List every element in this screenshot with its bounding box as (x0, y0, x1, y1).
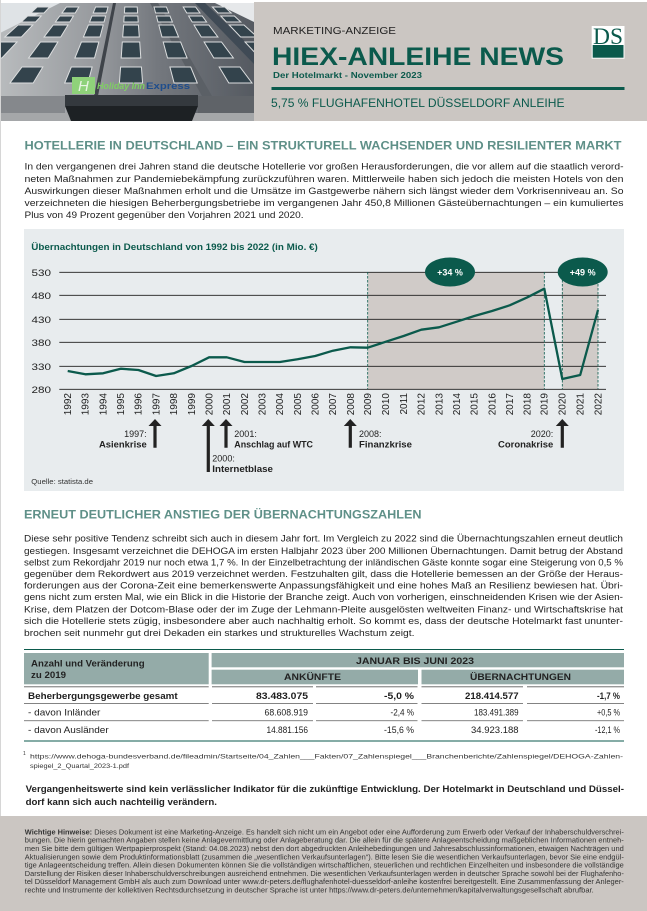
body text block: gens nicht zum ersten Mal, wie ein Blick in die Historie der Branche zeigt. Auch von vorherigen, einschneidenden Krisen wie der Asien- (24, 592, 623, 602)
x axis year labels: 2018 (523, 393, 534, 415)
x axis year labels: 2009 (363, 393, 374, 415)
arrow: 2000 dotcom bubble (202, 419, 273, 474)
x axis year labels: 2017 (505, 393, 516, 415)
x axis year labels: 2000 (204, 393, 215, 415)
body text block: sich die Hotellerie stets zügig, insbesondere aber auch nachhaltig erholt. So kommt es, dass der deutsche Hotelmarkt fast ununter- (24, 616, 623, 626)
badge: +49 % (558, 258, 608, 286)
table row: foreign (28, 725, 620, 735)
newsletter title: HIEX-ANLEIHE NEWS (272, 43, 564, 71)
arrow: 2008 financial crisis: Finanzkrise (359, 439, 412, 449)
table row: total (28, 691, 620, 701)
table header (24, 653, 624, 684)
intro text block: neten Maßnahmen zur Pandemiebekämpfung zurückzuführen waren. Mittlerweile haben sich jedoch die meisten Hotels von den (24, 174, 624, 184)
hotel sign: Express (146, 81, 190, 91)
hotel sign: H (78, 78, 89, 95)
arrow: 2020 corona crisis: 2020: (531, 429, 553, 439)
intro text block (24, 162, 624, 220)
intro text block: In den vergangenen drei Jahren stand die deutsche Hotellerie vor großen Herausforderungen, die vor allem auf die staatlich verord- (24, 162, 624, 172)
table row: domestic: - davon Inländer (28, 708, 100, 718)
table row: foreign: -15,6 % (384, 725, 414, 735)
panel: important notes footer: Darstellung der Risiken dieser Inhaberschuldverschreibungen ausreichend entnehmen. Die wesentlichen Verkaufsunterlagen werden in deutscher Sprache sowohl bei der Flughafenho- (25, 871, 624, 878)
panel: overnight stays chart (24, 229, 624, 491)
table row: domestic: 68.608.919 (264, 708, 308, 718)
panel: important notes footer (0, 816, 647, 911)
shaded growth period 2020-2022 (562, 272, 598, 389)
bond name: 5,75 % FLUGHAFENHOTEL DÜSSELDORF ANLEIHE (271, 96, 564, 110)
intro text block: verzeichneten die hiesigen Beherbergungsbetriebe im vergangenen Jahr 450,8 Millionen Gästeübernachtungen – ein kumuliertes (24, 198, 624, 208)
body text block (24, 534, 623, 638)
x axis year labels (63, 393, 604, 415)
table header: Anzahl und Veränderung (31, 658, 145, 668)
arrow: 2001 WTC attack: 2001: (234, 429, 257, 439)
table row: total: Beherbergungsgewerbe gesamt (28, 691, 178, 701)
body text block: Krise, dem Platzen der Dotcom-Blase oder der im Zuge der Lehmann-Pleite ausgelösten weltweiten Finanz- und Wirtschaftskrise hat (24, 604, 623, 614)
panel: important notes footer: Wichtige Hinweise: Dieses Dokument ist eine Marketing-Anzeige. Es handelt sich nicht um ein Angebot oder eine Aufforderung zum Erwerb oder Verkauf der Inhaberschuldverschrei- (25, 830, 625, 836)
subtitle: Der Hotelmarkt - November 2023 (273, 71, 423, 80)
arrow: 1997 Asian crisis: Asienkrise (99, 439, 147, 449)
arrow: 2008 financial crisis (344, 419, 412, 449)
body text block: brochen seit nunmehr gut drei Dekaden ein starkes und strukturelles Wachstum zeigt. (24, 628, 414, 638)
source note: Quelle: statista.de (31, 479, 93, 486)
footnote: spiegel_2_Quartal_2023-1.pdf (30, 763, 129, 770)
x axis year labels: 2001 (222, 393, 233, 415)
logo DS (592, 24, 624, 59)
badge: +34 %: +34 % (437, 268, 463, 278)
y axis labels: 480 (32, 291, 51, 302)
body text block: selbst zum Rekordjahr 2019 nur noch etwa 1,7 %. In der Einzelbetrachtung der inländischen Gäste konnte sogar eine Steigerung von 0,5 % (24, 558, 623, 568)
hotel sign (72, 77, 190, 95)
x axis year labels: 2016 (487, 393, 498, 415)
table row: domestic: -2,4 % (390, 708, 414, 718)
table row: foreign: 14.881.156 (266, 725, 308, 735)
line series (68, 289, 598, 379)
body text block: Diese sehr positive Tendenz schreibt sich auch in diesem Jahr fort. Im Vergleich zu 2022 sind die Übernachtungszahlen erneut deutlich (24, 534, 623, 544)
table header: JANUAR BIS JUNI 2023 (356, 656, 474, 666)
x axis year labels: 2011 (399, 393, 410, 415)
arrow: 2020 corona crisis: Coronakrise (498, 439, 553, 449)
x axis year labels: 1998 (169, 393, 180, 415)
x axis year labels: 2002 (240, 393, 251, 415)
x axis year labels: 1995 (116, 393, 127, 415)
y axis labels: 430 (32, 315, 51, 326)
arrow: 2001 WTC attack: Anschlag auf WTC (234, 439, 313, 449)
x axis year labels: 1993 (81, 393, 92, 415)
panel: important notes footer: rechte und Instrumente der kollektiven Rechtsdurchsetzung in deutscher Sprache ist unter https://www.dr-peters.de/unternehmen/kapitalverwaltungsgesellschaft abrufbar. (25, 888, 594, 894)
x axis year labels: 2012 (417, 393, 428, 415)
x axis year labels: 2005 (293, 393, 304, 415)
table row: total: 83.483.075 (256, 691, 308, 701)
intro text block: Auswirkungen dieser Maßnahmen erholt und die Umsätze im Gastgewerbe nähern sich längst wieder dem Vorkrisenniveau an. So (24, 186, 624, 196)
shaded growth period 2009-2019 (368, 272, 544, 389)
x axis year labels: 1999 (187, 393, 198, 415)
x axis year labels: 2013 (434, 393, 445, 415)
footnote (23, 751, 623, 770)
x axis year labels: 1997 (151, 393, 162, 415)
table row: domestic (28, 708, 620, 718)
heading: overnight stays rise: ERNEUT DEUTLICHER ANSTIEG DER ÜBERNACHTUNGSZAHLEN (24, 506, 421, 522)
panel: important notes footer: bungen. Die hierin gemachten Angaben stellen keine Anlagevermittlung oder Anlageberatung dar. Die allein für die spätere Anlageentscheidung maßgeblichen Informationen entneh- (25, 838, 625, 845)
table row: foreign: 34.923.188 (471, 725, 519, 735)
footnote: https://www.dehoga-bundesverband.de/fileadmin/Startseite/04_Zahlen___Fakten/07_Zahlenspiegel___Branchenberichte/Zahlenspiegel/DEHOGA-Zahlen- (30, 754, 623, 760)
x axis year labels: 2020 (558, 393, 569, 415)
panel: important notes footer: Aktualisierungen sowie dem Produktinformationsblatt (zusammen die „wesentlichen Verkaufsunterlagen“). Bitte lesen Sie die wesentlichen Verkaufsunterlagen, bevor Sie eine endgül- (25, 854, 625, 861)
x axis year labels: 2006 (310, 393, 322, 415)
y axis labels: 380 (32, 338, 51, 349)
logo DS: DS (593, 24, 623, 49)
x axis year labels: 2015 (470, 393, 481, 415)
x axis year labels: 2008 (346, 393, 357, 415)
y axis labels: 530 (32, 268, 51, 279)
arrow: 2001 WTC attack (220, 419, 313, 449)
x axis year labels: 2022 (593, 393, 604, 415)
arrow: 2020 corona crisis (498, 419, 569, 449)
x axis year labels: 2014 (452, 393, 463, 415)
table header: ANKÜNFTE (284, 672, 341, 682)
table row: domestic: +0,5 % (597, 708, 620, 718)
table row: total: -1,7 % (597, 691, 620, 701)
chart title: Übernachtungen in Deutschland von 1992 bis 2022 (in Mio. €) (31, 242, 318, 253)
body text block: forderungen aus der Corona-Zeit eine bemerkenswerte Anpassungsfähigkeit und eine hohes Maß an Resilienz bewiesen hat. Übri- (24, 580, 623, 590)
table header: ÜBERNACHTUNGEN (470, 672, 571, 682)
heading: hotel industry: HOTELLERIE IN DEUTSCHLAND – EIN STRUKTURELL WACHSENDER UND RESILIENTER MARKT (24, 138, 622, 152)
table row: foreign: - davon Ausländer (28, 725, 109, 735)
x axis year labels: 2007 (328, 393, 339, 415)
past performance disclaimer: dorf kann sich auch nachteilig verändern. (26, 797, 217, 807)
arrow: 1997 Asian crisis: 1997: (124, 429, 147, 439)
arrow: 2008 financial crisis: 2008: (359, 429, 382, 439)
table row: total: 218.414.577 (465, 691, 519, 701)
y axis labels: 280 (32, 385, 51, 396)
table: arrivals and overnight stays (24, 649, 624, 742)
panel: important notes footer: tel Düsseldorf Management GmbH als auch zum Download unter www.dr-peters.de/flughafenhotel-duesseldorf-anleihe kostenfrei bereitgestellt. Eine Zusammenfassung der Anleger- (25, 879, 625, 886)
x axis year labels: 2004 (275, 393, 286, 415)
arrow: 2000 dotcom bubble: 2000: (212, 454, 235, 464)
table header: zu 2019 (31, 670, 66, 680)
panel: important notes footer: tige Anlageentscheidung treffen. Allein diesen Dokumenten können Sie die vollständigen wirtschaftlichen, steuerlichen und rechtlichen Einzelheiten und insbesondere die vollständige (25, 863, 624, 870)
x axis year labels: 1994 (98, 393, 109, 415)
table row: total: -5,0 % (384, 691, 414, 701)
table row: domestic: 183.491.389 (474, 708, 519, 718)
x axis year labels: 2021 (576, 393, 586, 415)
arrow: 1997 Asian crisis (99, 419, 162, 449)
hotel photo (0, 3, 280, 121)
body text block: gegenüber dem Rekordwert aus 2019 verzeichnet werden. Festzuhalten gilt, dass die Hotellerie bemessen an der Größe der Heraus- (24, 569, 623, 579)
x axis year labels: 1996 (134, 393, 145, 415)
header banner (0, 2, 647, 121)
y axis labels (32, 268, 51, 396)
x axis year labels: 2019 (540, 393, 551, 415)
intro text block: Plus von 49 Prozent gegenüber den Vorjahren 2021 und 2020. (24, 210, 304, 220)
x axis year labels: 2010 (381, 393, 392, 415)
badge: +49 %: +49 % (570, 268, 596, 278)
x axis year labels: 1992 (63, 393, 74, 415)
badge: +34 % (425, 258, 475, 286)
body text block: gestiegen. Insgesamt verzeichnet die DEHOGA im ersten Halbjahr 2023 über 200 Millionen Übernachtungen. Damit betrug der Abstand (24, 546, 623, 556)
y axis labels: 330 (32, 362, 51, 373)
past performance disclaimer (26, 784, 624, 807)
x axis year labels: 2003 (258, 393, 268, 415)
table row: foreign: -12,1 % (595, 725, 620, 735)
footnote: 1 (23, 751, 26, 757)
marketing label: MARKETING-ANZEIGE (273, 25, 396, 37)
past performance disclaimer: Vergangenheitswerte sind kein verlässlicher Indikator für die zukünftige Entwicklung. Der Hotelmarkt in Deutschland und Düssel- (26, 784, 624, 794)
hotel sign: Holiday Inn (97, 81, 145, 91)
arrow: 2000 dotcom bubble: Internetblase (212, 464, 273, 474)
panel: important notes footer: men Sie bitte dem gültigen Wertpapierprospekt (Stand: 04.08.2023) nebst den dort abgedruckten Anleihebedingungen und Jahresabschlussinformationen, etwaigen Nachträgen und (25, 846, 624, 853)
